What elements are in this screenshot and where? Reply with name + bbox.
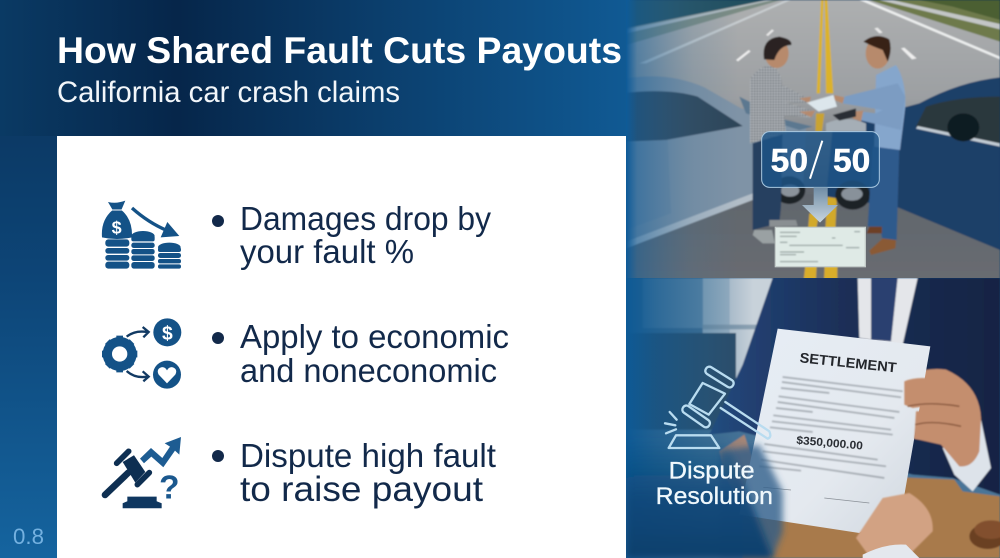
arrow down to check: [802, 187, 838, 223]
man right: [834, 36, 905, 255]
50/50 badge: [762, 132, 879, 187]
icon: money bag and coins with falling arrow: [102, 201, 181, 269]
settlement document: $350,000.00: [796, 435, 863, 453]
cuff and hand right: [943, 420, 991, 491]
table: [743, 477, 1000, 558]
suit: [709, 278, 1000, 495]
bullet: damages: your fault %: [240, 233, 414, 270]
panel: key points: [57, 136, 626, 558]
50/50 badge: 50: [771, 142, 808, 178]
man left: [750, 37, 815, 243]
icon: gear with arrows to dollar and heart: $: [162, 323, 173, 344]
bullet: dispute: Dispute high fault: [240, 437, 496, 474]
dispute resolution label: Resolution: [656, 483, 773, 510]
bullet: dispute: [212, 437, 496, 509]
settlement document: [739, 329, 930, 533]
icon: gavel with rising arrow and question mark: [105, 437, 181, 508]
bullet: damages: [212, 200, 491, 270]
panel: road crash photo: [626, 0, 1000, 280]
left car: [626, 76, 806, 243]
lower left hand: [718, 434, 752, 490]
bullet: apply: Apply to economic: [240, 318, 509, 355]
icon: money bag and coins with falling arrow: $: [112, 217, 122, 237]
bullet: apply: [212, 318, 509, 389]
title: How Shared Fault Cuts Payouts: [57, 30, 622, 71]
icon: outlined gavel: [665, 365, 770, 448]
settlement check: [775, 227, 865, 267]
version label: 0.8: [13, 524, 44, 549]
bullet: dispute: to raise payout: [240, 470, 483, 509]
50/50 badge: 50: [833, 142, 870, 178]
bullet: apply: and noneconomic: [240, 352, 497, 389]
icon: gear with arrows to dollar and heart: [102, 318, 181, 389]
right car: [826, 77, 1000, 250]
dispute resolution label: [658, 460, 772, 504]
panel: settlement photo: [626, 278, 1000, 558]
dispute resolution label: Dispute: [669, 458, 755, 485]
subtitle: California car crash claims: [57, 76, 400, 109]
bullet: damages: Damages drop by: [240, 200, 491, 237]
bottom hand: [856, 493, 933, 556]
icon: gavel with rising arrow and question mark: ?: [159, 470, 180, 507]
fingers over document: [904, 378, 961, 439]
settlement document: SETTLEMENT: [799, 349, 898, 375]
